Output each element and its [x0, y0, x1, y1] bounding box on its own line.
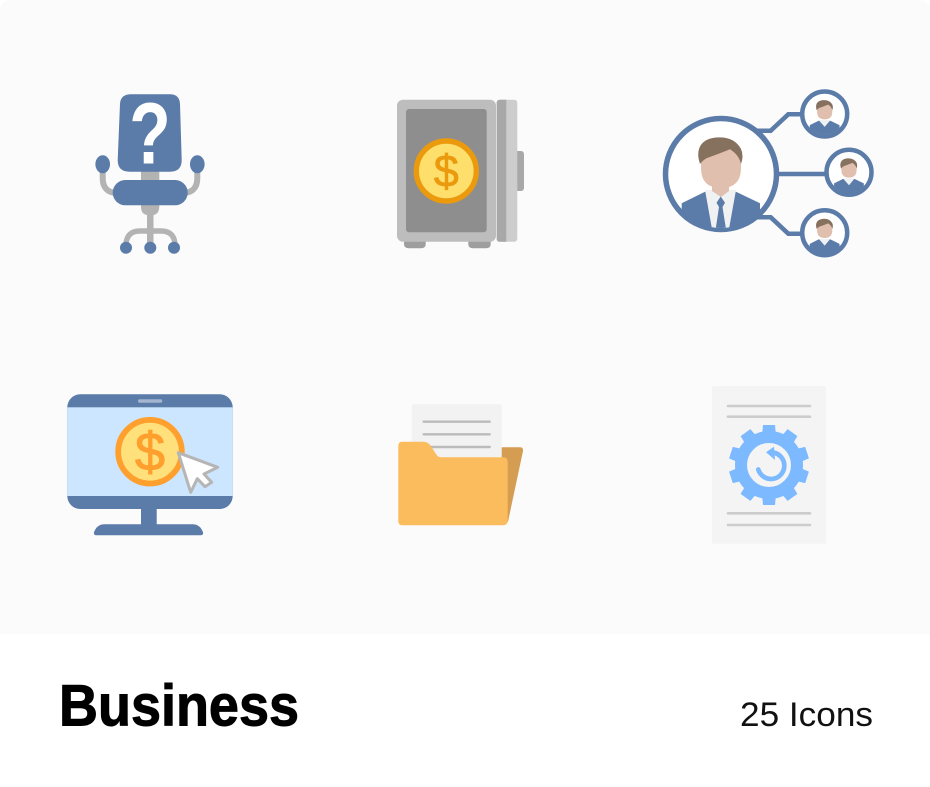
- wheels: [120, 242, 180, 254]
- connectors: [757, 114, 826, 234]
- icon: safe with coin: [397, 100, 524, 248]
- icon: document with gear: [712, 386, 826, 544]
- icon: people network: [666, 92, 872, 258]
- folder front: [398, 442, 508, 525]
- document lines: [728, 406, 810, 525]
- refresh arrow: [758, 447, 784, 479]
- paper lines: [424, 422, 490, 447]
- monitor frame: [67, 394, 233, 509]
- satellite person three: [802, 210, 847, 258]
- icon: open folder with paper: [398, 404, 523, 525]
- satellite person two: [826, 150, 872, 197]
- title: Business: [59, 674, 299, 738]
- safe feet: [404, 240, 491, 248]
- gear: [729, 425, 809, 505]
- icon count: 25 Icons: [740, 696, 873, 734]
- safe door: [497, 100, 517, 242]
- seat: [113, 180, 188, 205]
- cursor arrow: [178, 453, 218, 492]
- satellite person one: [802, 92, 847, 139]
- door edge: [497, 100, 506, 242]
- chair back: [118, 94, 182, 172]
- monitor stand: [94, 509, 203, 535]
- coin: [118, 420, 182, 484]
- paper sheet: [412, 404, 502, 464]
- camera slot: [138, 399, 162, 403]
- document page: [712, 386, 826, 544]
- main person: [682, 137, 760, 228]
- main person circle: [666, 118, 776, 230]
- folder back: [495, 447, 523, 522]
- monitor screen: [67, 407, 233, 496]
- dollar sign: $: [135, 422, 165, 482]
- chair neck and stem: [141, 170, 159, 245]
- question mark: ?: [129, 84, 171, 182]
- safe body: [397, 100, 496, 242]
- safe interior: [406, 109, 487, 232]
- arm pads: [95, 155, 205, 173]
- icon: office chair with question mark: [95, 84, 205, 254]
- gold coin: [416, 141, 476, 201]
- chair arms: [103, 170, 197, 193]
- chair base: [126, 231, 175, 244]
- icon: monitor with coin and cursor: [67, 394, 233, 535]
- dollar sign: $: [434, 146, 459, 196]
- safe handle: [512, 151, 524, 191]
